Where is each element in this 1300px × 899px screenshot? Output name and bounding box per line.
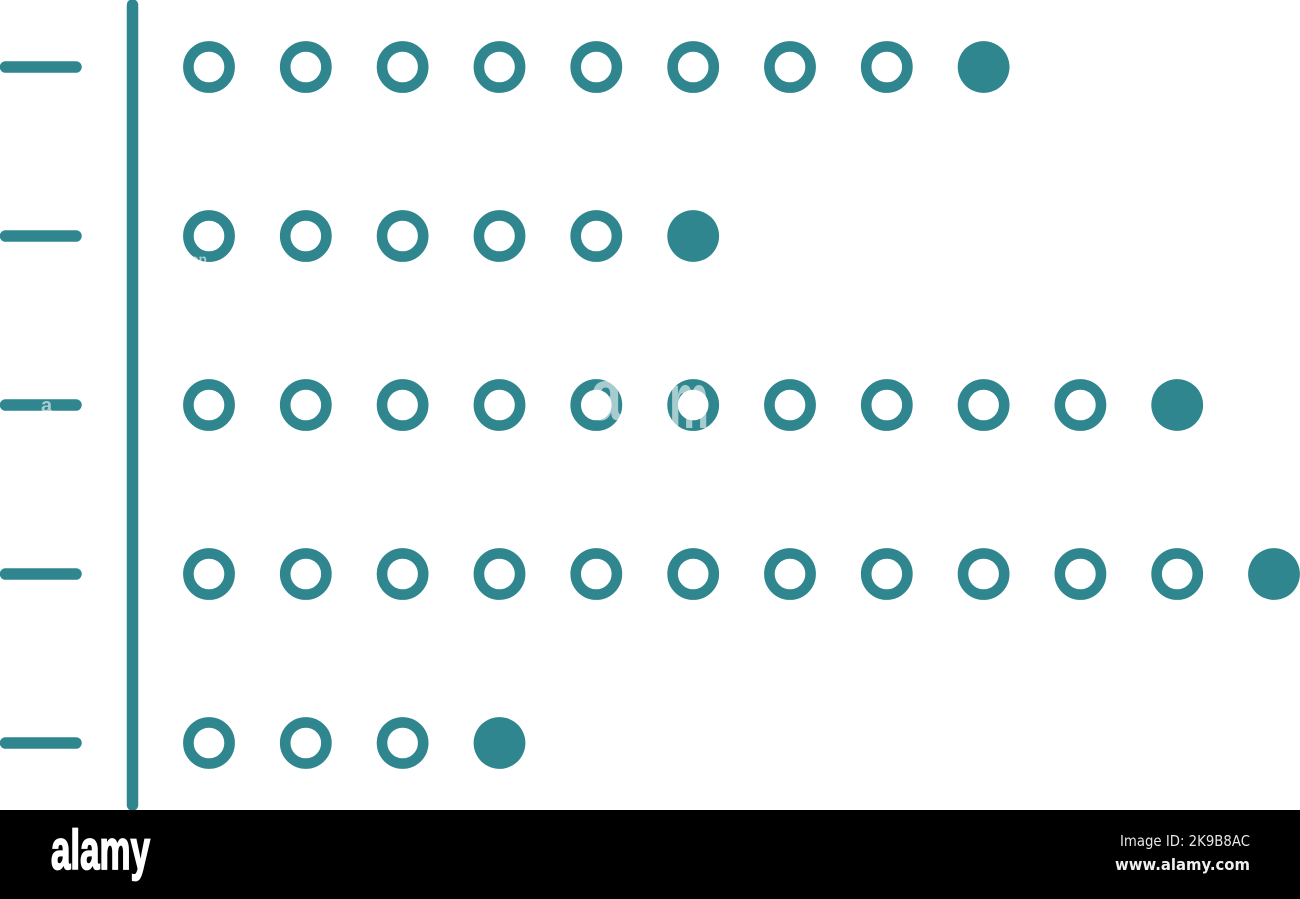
- faint watermark traces: on: [190, 251, 207, 267]
- faint watermark traces: [41, 251, 709, 445]
- footer bar: [0, 810, 1300, 899]
- row 1: tick and nine dots: [6, 41, 1009, 93]
- image id: Image ID: 2K9B8AC: [1120, 832, 1250, 850]
- faint watermark traces: m: [669, 356, 709, 445]
- vertical axis: [127, 5, 138, 805]
- row 4: tick and twelve dots: [6, 548, 1300, 600]
- faint watermark traces: a: [590, 356, 623, 436]
- website url: www.alamy.com: [1115, 855, 1250, 874]
- logo wordmark: alamy: [51, 818, 150, 881]
- faint watermark traces: a: [41, 395, 53, 417]
- row 2: tick and six dots: [6, 210, 719, 262]
- row 3: tick and eleven dots: [6, 379, 1203, 431]
- row 5: tick and four dots: [6, 717, 525, 769]
